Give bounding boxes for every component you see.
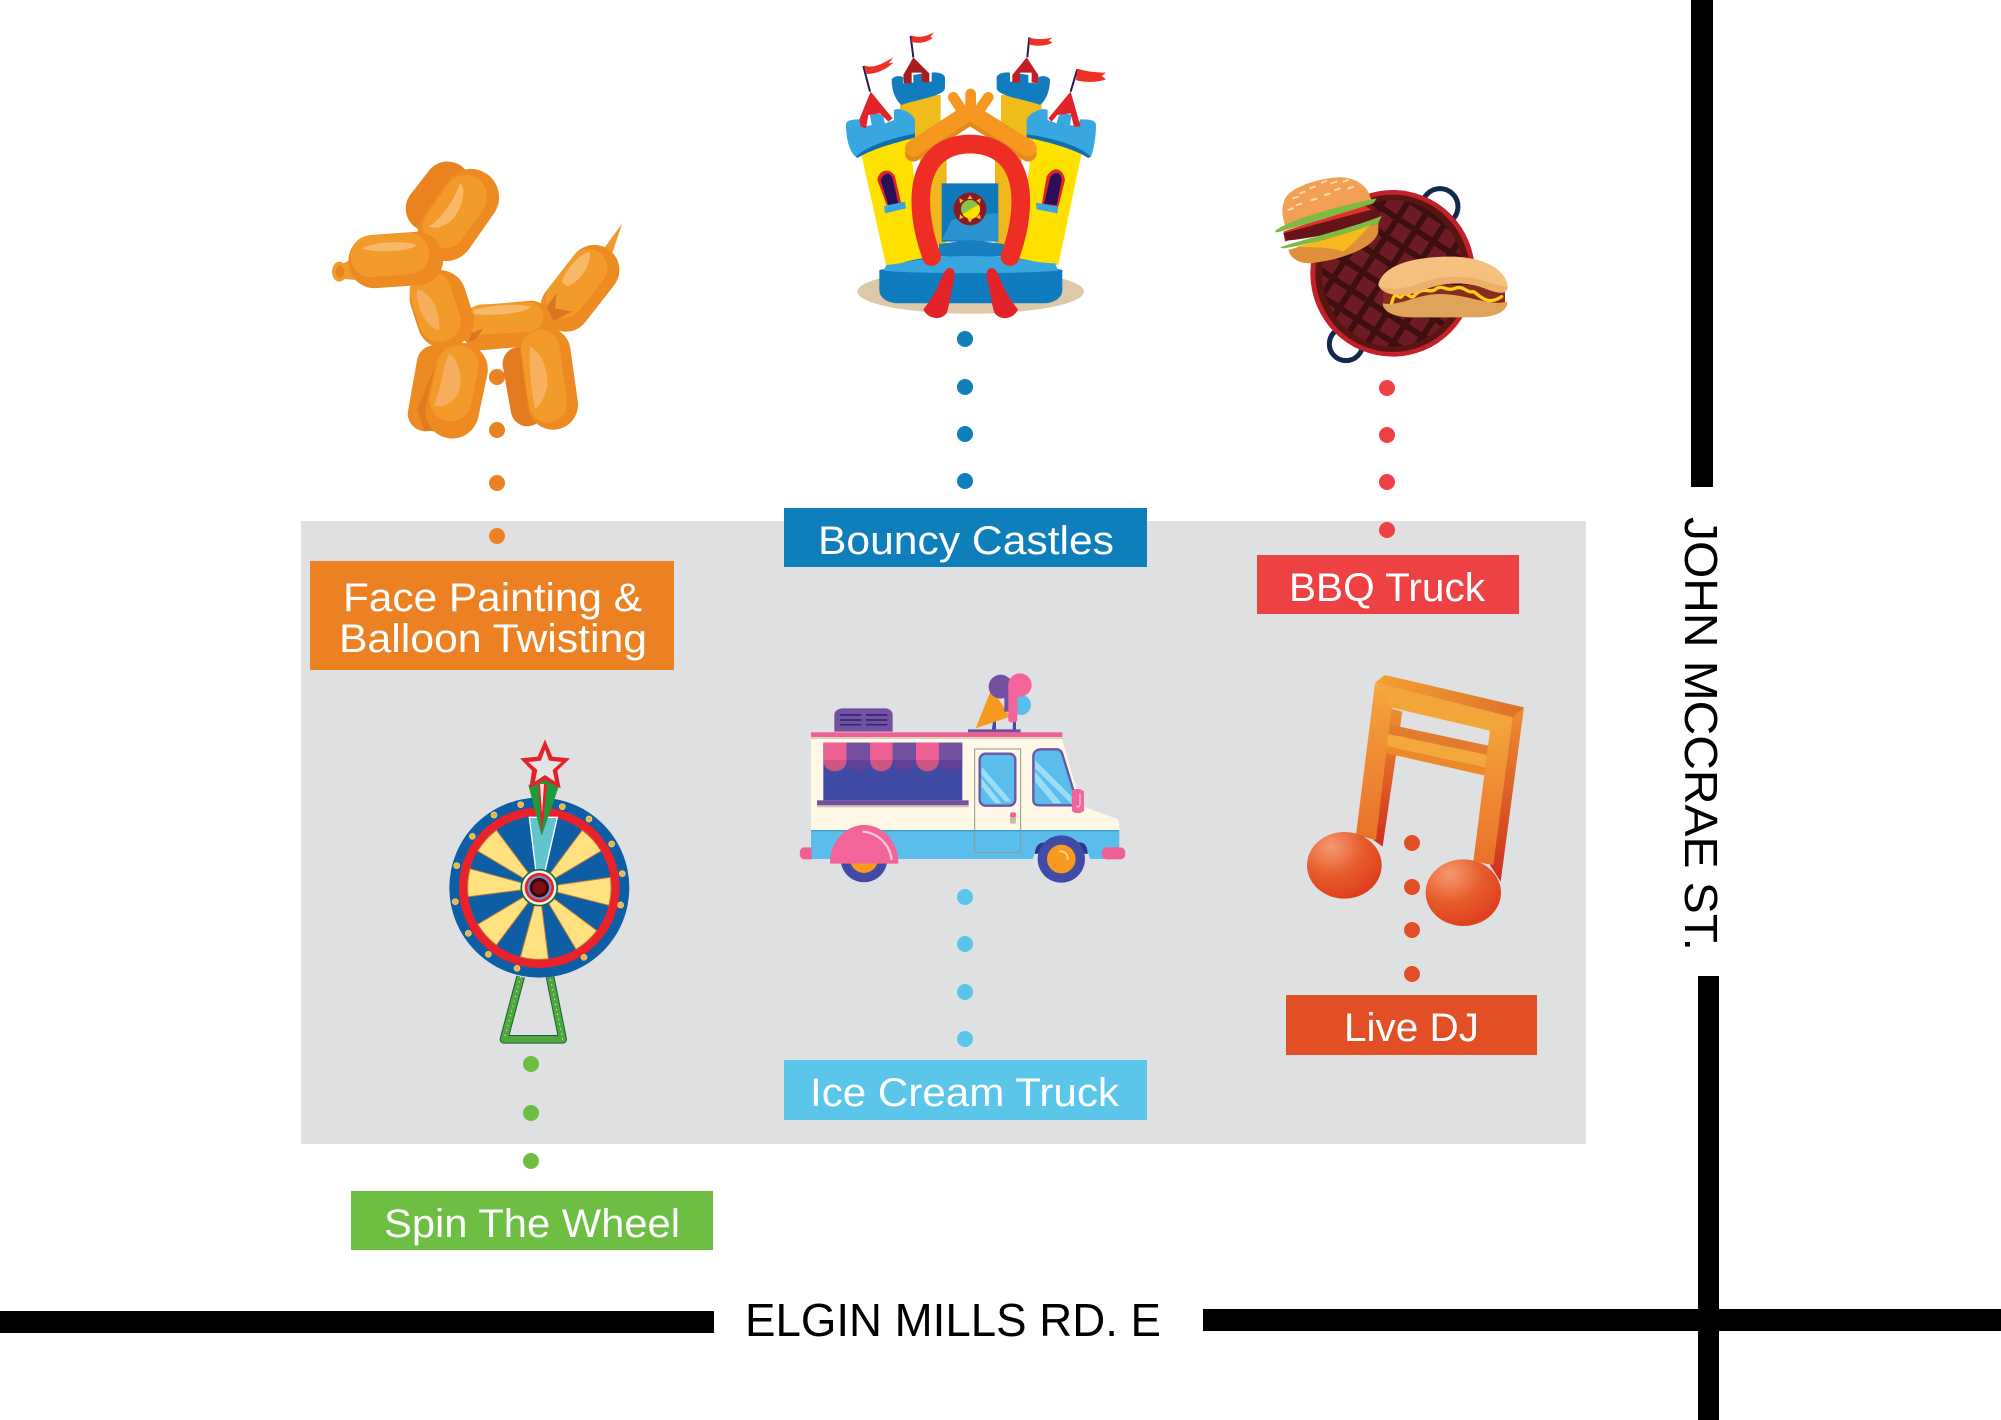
grey venue panel (301, 521, 1586, 1144)
label: BBQ Truck: BBQ Truck (1289, 566, 1486, 610)
road: John McCrae (1675, 0, 1727, 1420)
icon: BBQ grill with burger and hot dog (1275, 177, 1508, 361)
label: Face Painting & Balloon Twisting: Balloon Twisting (339, 617, 647, 661)
label: Bouncy Castles (784, 508, 1147, 567)
label: Face Painting & Balloon Twisting (310, 561, 674, 670)
dotted line: face painting (489, 369, 505, 544)
label: Bouncy Castles: Bouncy Castles (818, 519, 1114, 563)
road: Elgin Mills (0, 1294, 2001, 1346)
road: John McCrae: JOHN MCCRAE ST. (1675, 517, 1727, 951)
icon: ice cream truck (800, 673, 1125, 883)
label: Spin The Wheel: Spin The Wheel (384, 1202, 680, 1246)
label: Spin The Wheel (351, 1191, 713, 1250)
dotted line: live DJ (1404, 835, 1420, 982)
label: Live DJ: Live DJ (1344, 1006, 1479, 1050)
label: Face Painting & Balloon Twisting: Face Painting & (343, 576, 642, 620)
dotted line: BBQ truck (1379, 380, 1395, 538)
label: Ice Cream Truck (784, 1060, 1147, 1120)
icon: music note (1307, 675, 1524, 926)
label: BBQ Truck (1257, 555, 1519, 614)
dotted line: ice cream truck (957, 889, 973, 1047)
dotted line: spin the wheel (523, 1056, 539, 1169)
label: Live DJ (1286, 995, 1537, 1055)
icon: bouncy castle (846, 32, 1106, 318)
icon: spin the wheel (449, 739, 629, 1039)
label: Ice Cream Truck: Ice Cream Truck (810, 1071, 1120, 1115)
dotted line: bouncy castles (957, 331, 973, 489)
icon: balloon dog (332, 152, 629, 443)
road: Elgin Mills: ELGIN MILLS RD. E (745, 1294, 1161, 1346)
